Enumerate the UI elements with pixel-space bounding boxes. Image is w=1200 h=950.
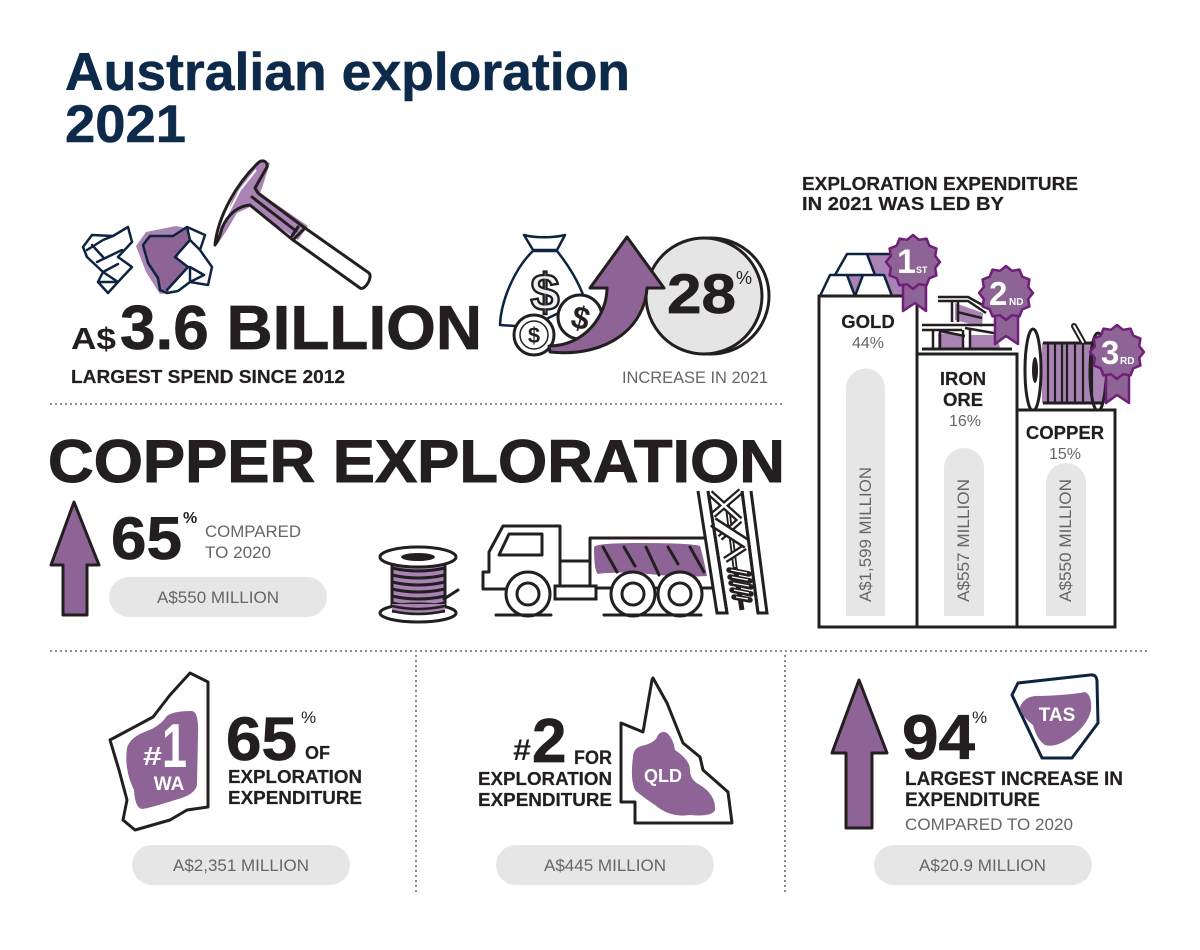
- pill: value: [874, 845, 1092, 885]
- bar: copper: A$550 MILLION: [1056, 479, 1075, 602]
- bar: iron ore: IRON: [940, 368, 986, 389]
- title: Australian exploration: [65, 43, 630, 102]
- description: EXPENDITURE: [905, 790, 1040, 811]
- pill: value: A$20.9 MILLION: [919, 856, 1046, 875]
- panel: total spend: [71, 161, 482, 387]
- title: 2021: [65, 95, 186, 154]
- statistic: 65: [226, 705, 297, 773]
- pill: value: [496, 845, 714, 885]
- description: COMPARED TO 2020: [905, 816, 1073, 834]
- icon: copper reel: [1025, 326, 1106, 411]
- badge: first: ST: [916, 265, 928, 275]
- icon: money bag: [500, 235, 602, 355]
- icon: drill rig: [698, 491, 767, 613]
- heading: EXPLORATION EXPENDITURE: [802, 174, 1078, 194]
- icon: WA map: [110, 673, 208, 830]
- icon: up arrow: [832, 680, 887, 828]
- statistic: EXPLORATION: [478, 768, 612, 789]
- bar: gold: [819, 296, 917, 627]
- heading: [802, 174, 1078, 214]
- panel: copper exploration: [48, 428, 785, 622]
- bar: gold: A$1,599 MILLION: [856, 467, 875, 602]
- amount: A$: [71, 321, 116, 356]
- panel: Western Australia: [110, 673, 362, 885]
- icon: geological hammer: [215, 161, 370, 288]
- icon: TAS map: [1012, 675, 1098, 758]
- percentage: %: [736, 268, 752, 288]
- badge: third: RD: [1120, 356, 1134, 367]
- icon: WA map: #: [143, 741, 163, 771]
- badge: second: ND: [1009, 297, 1023, 308]
- statistic: EXPLORATION: [228, 766, 362, 787]
- statistic: [226, 705, 362, 808]
- arrow: [549, 237, 664, 353]
- statistic: 94: [902, 703, 975, 773]
- comparison text: TO 2020: [205, 543, 271, 562]
- icon: copper spool: [380, 547, 458, 622]
- pill: value: A$2,351 MILLION: [173, 856, 309, 875]
- badge: first: 1: [897, 243, 916, 281]
- percentage: 28: [667, 262, 736, 325]
- bar: gold: 44%: [852, 335, 884, 352]
- pill: value: A$445 MILLION: [544, 856, 666, 875]
- badge: first: [886, 235, 940, 311]
- statistic: %: [301, 708, 316, 727]
- percentage: %: [183, 510, 197, 527]
- statistic: FOR: [574, 748, 612, 769]
- icon: coin: [646, 238, 769, 354]
- comparison text: [205, 522, 301, 562]
- pill: value: [109, 577, 327, 617]
- panel: 28 percent increase: [500, 235, 769, 387]
- heading: IN 2021 WAS LED BY: [802, 194, 1004, 214]
- pill: value: A$550 MILLION: [157, 588, 279, 607]
- heading: COPPER EXPLORATION: [48, 428, 785, 495]
- description: [905, 769, 1123, 834]
- panel: Queensland: [478, 678, 732, 885]
- bar: copper: COPPER: [1026, 422, 1104, 443]
- badge: third: [1090, 325, 1144, 403]
- subheading: LARGEST SPEND SINCE 2012: [71, 366, 345, 387]
- icon: money bag: $: [531, 264, 560, 322]
- icon: QLD map: QLD: [644, 766, 682, 786]
- bar: iron ore: ORE: [943, 389, 983, 410]
- icon: iron beams: [922, 297, 1012, 349]
- icon: money bag: $: [567, 298, 594, 338]
- icon: drill truck: [483, 526, 712, 616]
- badge: third: 3: [1101, 334, 1119, 371]
- panel: Tasmania: [832, 675, 1123, 885]
- badge: second: [979, 266, 1033, 344]
- icon: TAS map: TAS: [1039, 705, 1075, 726]
- bar: gold: GOLD: [841, 311, 895, 332]
- badge: second: 2: [989, 275, 1007, 312]
- percentage: 65: [111, 505, 182, 572]
- bar: copper: 15%: [1049, 446, 1081, 463]
- icon: gold bars: [820, 254, 905, 296]
- pill: value: [132, 845, 350, 885]
- description: LARGEST INCREASE IN: [905, 769, 1123, 790]
- amount: 3.6 BILLION: [120, 294, 482, 363]
- icon: QLD map: [621, 678, 732, 823]
- icon: up arrow: [51, 502, 99, 615]
- statistic: EXPENDITURE: [228, 787, 362, 808]
- statistic: [478, 707, 612, 810]
- bar: iron ore: [917, 354, 1017, 627]
- statistic: %: [972, 708, 987, 727]
- comparison text: COMPARED: [205, 522, 301, 541]
- title: [65, 43, 630, 154]
- icon: WA map: WA: [154, 774, 185, 795]
- statistic: OF: [305, 743, 330, 763]
- icon: money bag: $: [528, 323, 540, 348]
- icon: WA map: 1: [162, 712, 187, 781]
- statistic: 2: [532, 707, 566, 776]
- statistic: #: [513, 734, 531, 767]
- icon: rocks: [83, 226, 212, 294]
- statistic: EXPENDITURE: [478, 789, 612, 810]
- bar: iron ore: A$557 MILLION: [954, 479, 973, 602]
- bar: copper: [1017, 410, 1115, 627]
- caption: INCREASE IN 2021: [622, 369, 768, 387]
- panel: commodities: [802, 174, 1144, 627]
- bar: iron ore: 16%: [949, 413, 981, 430]
